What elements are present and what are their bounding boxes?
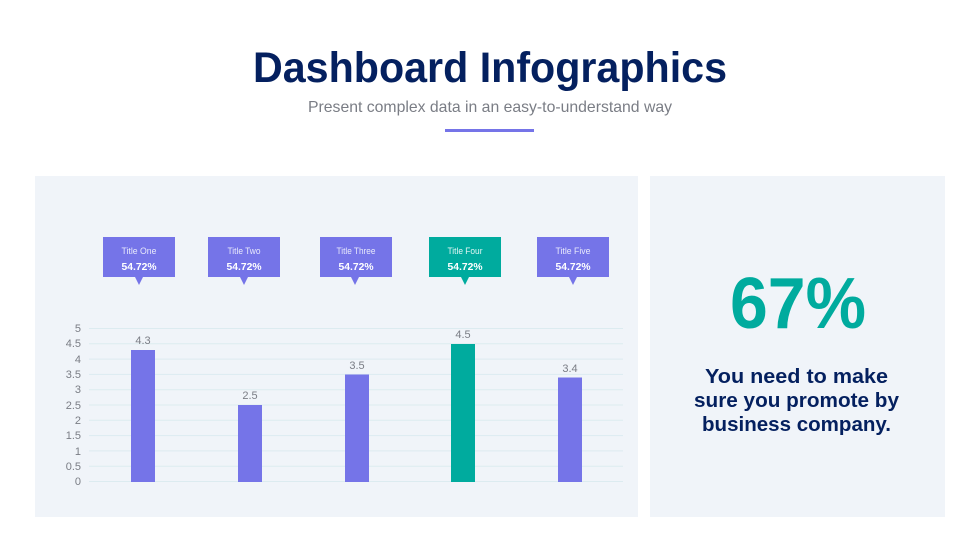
y axis labels: 5: [75, 323, 81, 335]
y axis labels: 2: [75, 415, 81, 427]
y axis labels: [66, 323, 81, 488]
panel background: [650, 176, 945, 517]
callout: Title Five: 54.72%: [556, 261, 591, 273]
y axis labels: 3.5: [66, 369, 81, 381]
panel background: [35, 176, 638, 517]
callout: Title One: Title One: [122, 246, 156, 256]
callout: Title One: [103, 237, 175, 285]
bar: Title One 4.3: [131, 335, 155, 482]
big percentage: 67%: [730, 264, 866, 344]
title: Dashboard Infographics: [253, 44, 727, 92]
y axis labels: 1: [75, 446, 81, 458]
callout: Title Three: 54.72%: [338, 261, 374, 273]
bar: Title Five 3.4: [558, 363, 582, 482]
bar: Title Three 3.5: [345, 360, 369, 482]
statistic description: [694, 366, 900, 436]
callout: Title Two: Title Two: [228, 246, 260, 256]
panel: bar chart: [35, 176, 638, 517]
bar: Title Five 3.4: 3.4: [562, 363, 578, 375]
y axis labels: 0.5: [66, 461, 81, 473]
y axis labels: 4: [75, 354, 81, 366]
callout: Title Four: Title Four: [448, 246, 482, 256]
statistic description: sure you promote by: [694, 390, 900, 412]
bar: Title One 4.3: 4.3: [135, 335, 151, 347]
bar: Title Four 4.5: 4.5: [455, 329, 471, 341]
header: [253, 44, 727, 132]
callout: Title Three: Title Three: [336, 246, 376, 256]
bar: Title Two 2.5: 2.5: [242, 390, 258, 402]
y axis labels: 0: [75, 476, 81, 488]
callout: Title Three: [320, 237, 392, 285]
y axis labels: 3: [75, 384, 81, 396]
title underline: [445, 129, 534, 132]
callout: Title Two: [208, 237, 280, 285]
callout: Title Four: [429, 237, 501, 285]
subtitle: Present complex data in an easy-to-understand way: [308, 99, 672, 116]
bar: Title Two 2.5: [238, 390, 262, 482]
panel: key statistic: [650, 176, 945, 517]
callout: Title One: 54.72%: [122, 261, 157, 273]
y axis labels: 2.5: [66, 400, 81, 412]
statistic description: business company.: [702, 414, 891, 436]
bar: Title Four 4.5: [451, 329, 475, 482]
statistic description: You need to make: [705, 366, 888, 388]
y axis labels: 4.5: [66, 338, 81, 350]
callout: Title Five: [537, 237, 609, 285]
chart gridlines: [89, 328, 623, 482]
callout: Title Five: Title Five: [556, 246, 590, 256]
callout: Title Two: 54.72%: [226, 261, 262, 273]
bar: Title Three 3.5: 3.5: [349, 360, 365, 372]
y axis labels: 1.5: [66, 430, 81, 442]
callout: Title Four: 54.72%: [448, 261, 483, 273]
